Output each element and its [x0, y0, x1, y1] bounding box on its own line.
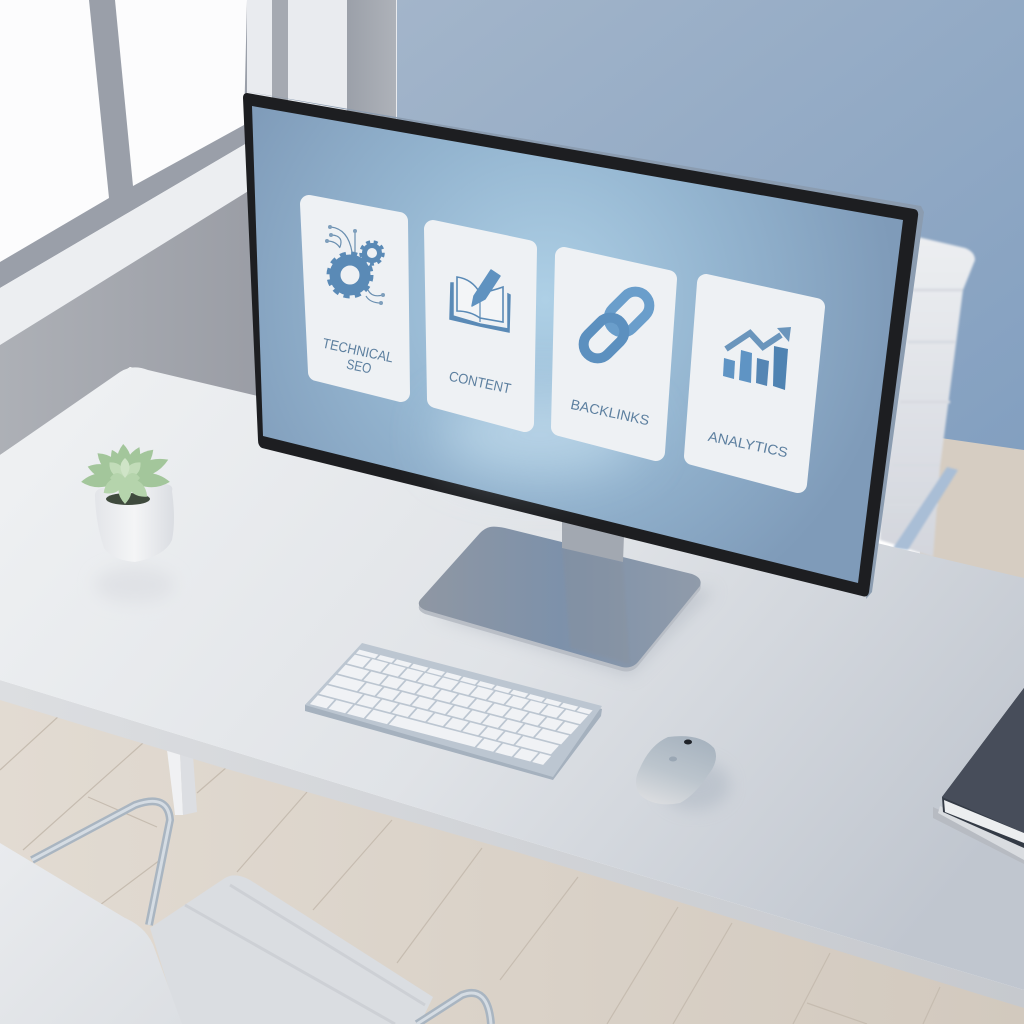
icon: gears and circuits	[325, 225, 385, 305]
desk edge	[0, 680, 1024, 1008]
card: technical seo	[309, 204, 401, 393]
card: analytics	[693, 283, 816, 484]
back wall	[396, 0, 1024, 470]
desk top	[0, 367, 1024, 990]
icon: bar chart with arrow	[723, 327, 791, 390]
label: technical seo: TECHNICAL	[321, 335, 395, 365]
window sill	[0, 143, 250, 345]
monitor stand	[419, 520, 701, 671]
far chair behind monitor	[880, 237, 975, 557]
keyboard	[305, 643, 602, 780]
desk leg	[167, 750, 197, 815]
label: technical seo: SEO	[345, 356, 373, 377]
screen	[252, 106, 903, 583]
wooden floor behind desk	[920, 435, 1024, 600]
wall column	[247, 0, 397, 200]
label: analytics: ANALYTICS	[707, 428, 789, 460]
lower wall	[0, 190, 262, 455]
foreground chair	[0, 801, 491, 1024]
icon: chain link	[578, 286, 655, 364]
monitor	[243, 91, 924, 599]
icon: book and pen	[450, 270, 510, 332]
label: backlinks: BACKLINKS	[569, 396, 651, 428]
monitor shadow on desk	[430, 585, 715, 676]
card: content	[433, 229, 528, 423]
label: content: CONTENT	[448, 368, 513, 397]
plant shadow	[95, 567, 175, 603]
screen glow	[440, 395, 640, 475]
card: backlinks	[560, 256, 668, 452]
window glass panes	[0, 0, 247, 262]
mouse shadow	[660, 760, 730, 810]
mouse	[636, 736, 716, 804]
floor in foreground	[0, 695, 1024, 1024]
window frame	[0, 0, 247, 288]
notebooks	[933, 688, 1024, 864]
potted succulent	[81, 444, 174, 562]
